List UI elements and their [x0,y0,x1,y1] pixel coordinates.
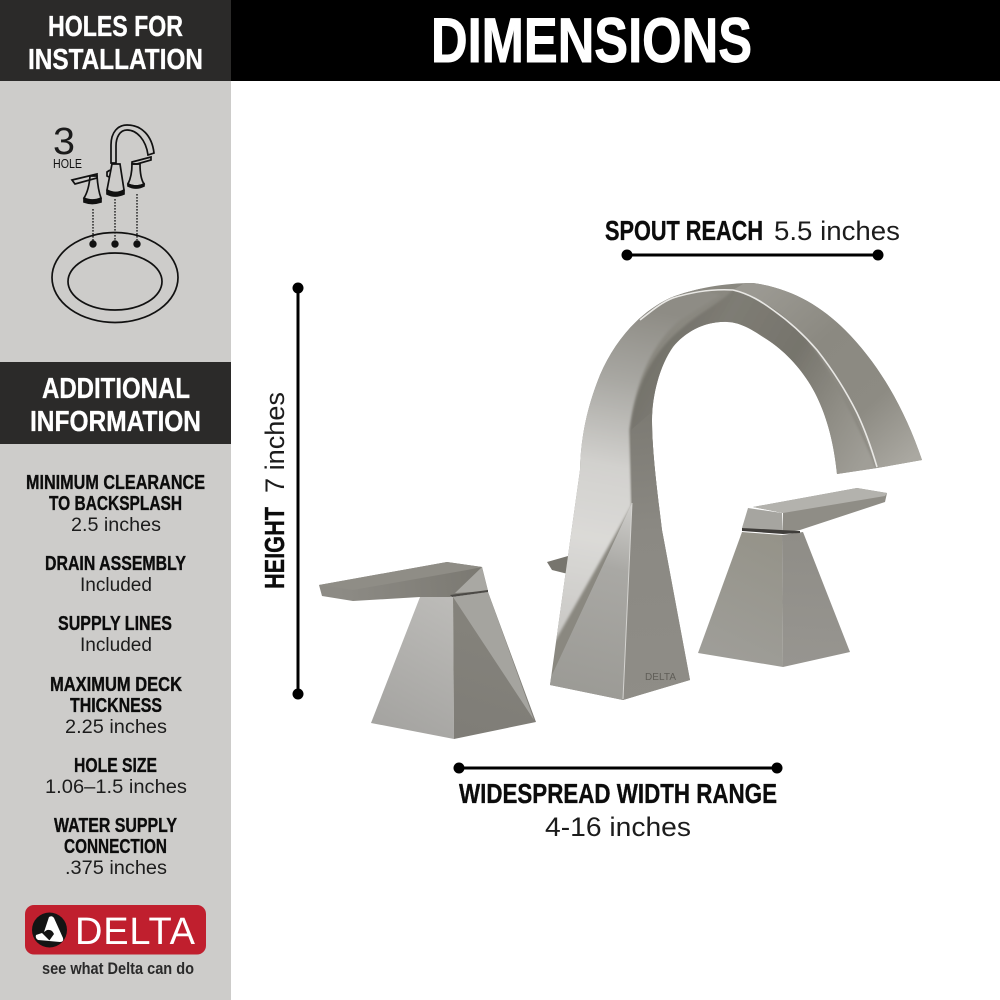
lever [753,488,887,533]
dimension: height: HEIGHT [259,507,290,589]
inner arch band [628,291,876,542]
left bright face [556,288,701,641]
spec: maximum deck thickness: 2.25 inches [65,716,167,738]
dimension: spout reach [605,215,900,260]
faucet: rear right handle [698,488,887,667]
logo: delta: see what Delta can do [42,960,194,978]
dimension: widespread width range [454,762,782,842]
spec: minimum clearance: MINIMUM CLEARANCE [26,472,205,494]
faucet: spout [550,283,922,700]
icon: three hole faucet over sink [52,121,178,322]
lever [319,562,488,601]
mounting holes [89,240,141,248]
spec: hole size: HOLE SIZE [74,755,157,777]
spec: water supply connection: WATER SUPPLY [54,815,178,837]
label: 3 hole: HOLE [53,156,82,171]
outer band [733,278,930,470]
spec: supply lines: Included [80,634,152,656]
faucet spout line art [107,125,154,196]
base left face [698,532,783,667]
neck lower right facet [623,410,695,705]
logo: delta [25,905,206,978]
neck lower left facet [545,503,632,705]
header: holes for installation: INSTALLATION [28,44,203,76]
spec: hole size: 1.06–1.5 inches [45,776,187,798]
spec: drain assembly: Included [80,574,152,596]
header: additional information: INFORMATION [30,406,201,438]
neck edge line [623,503,632,699]
faucet: rear drain lever [547,556,568,574]
header: holes for installation [0,0,231,81]
spec: maximum deck thickness: MAXIMUM DECK [50,674,182,696]
spec: drain assembly: DRAIN ASSEMBLY [45,553,187,575]
engraved mark: DELTA [645,672,676,683]
header: additional information: ADDITIONAL [42,373,190,405]
spec: hole size [45,755,187,798]
dimension: spout reach: SPOUT REACH [605,215,763,246]
spec: water supply connection: .375 inches [65,857,167,879]
base right face [782,532,850,667]
dimension: widespread width range: WIDESPREAD WIDTH RANGE [459,778,777,809]
label: 3 hole [53,121,82,171]
spec: maximum deck thickness [50,674,182,738]
icon: delta mark [32,912,67,948]
base right face [453,592,536,739]
header: additional information [0,362,231,444]
spec: maximum deck thickness: THICKNESS [70,695,162,717]
spec: supply lines: SUPPLY LINES [58,613,172,635]
logo: delta: DELTA [75,911,196,953]
spec: drain assembly [45,553,187,596]
left handle line art [72,174,101,204]
cap [742,508,783,533]
right handle line art [128,157,151,188]
dimension: height: 7 inches [260,392,290,493]
sink basin [52,232,178,322]
spec: minimum clearance [26,472,205,536]
base left face [371,597,454,739]
dimension: widespread width range: 4-16 inches [545,812,691,842]
spec: water supply connection [54,815,178,879]
title banner: dimensions: DIMENSIONS [431,6,752,76]
dimension: height [259,282,304,700]
label: 3 hole: 3 [53,121,75,163]
spec: water supply connection: CONNECTION [64,836,167,858]
dimension: spout reach: 5.5 inches [774,216,900,246]
header: holes for installation: HOLES FOR [48,11,183,43]
dotted guide lines [93,194,137,244]
sidebar background [0,0,231,1000]
spec: minimum clearance: TO BACKSPLASH [49,493,182,515]
spout body silhouette [550,283,922,700]
faucet: left handle [319,562,536,739]
spout highlight line [640,290,877,467]
spec: supply lines [58,613,172,656]
title banner: dimensions [231,0,1000,81]
spec: minimum clearance: 2.5 inches [71,514,161,536]
